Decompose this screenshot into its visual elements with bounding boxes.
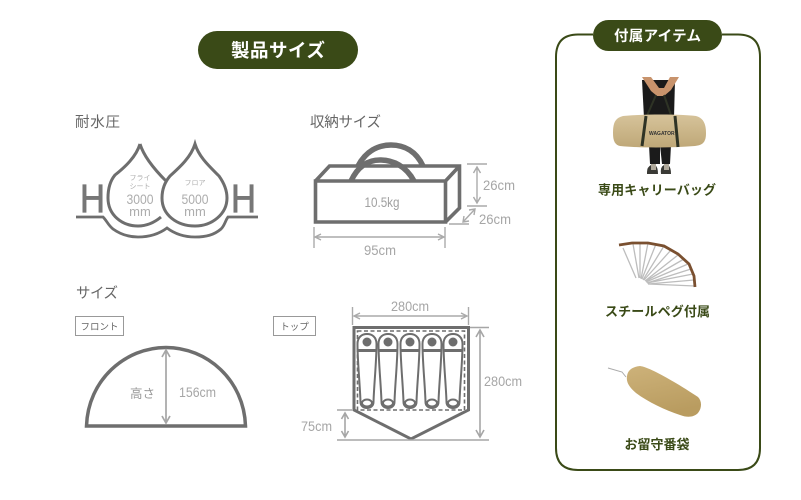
photo: steel pegs — [619, 243, 695, 287]
icon: box — [316, 166, 460, 222]
panel heading pill: 付属アイテム — [614, 28, 701, 45]
fly sheet label: フライ — [130, 174, 150, 182]
water resistance diagram — [76, 144, 258, 237]
dimension: vestibule — [337, 410, 352, 437]
top view diagram — [301, 298, 522, 440]
dimension: width — [314, 227, 445, 248]
fly sheet label: シート — [130, 184, 150, 190]
icon: ground line with dips — [76, 217, 258, 237]
front label — [76, 316, 124, 336]
fly sheet label: 3000 — [126, 191, 154, 207]
height arrow — [162, 350, 170, 423]
icon: fly sheet drop — [108, 144, 166, 226]
photo: carry bag held by person — [613, 77, 706, 174]
floor label: mm — [184, 204, 206, 219]
front label: フロント — [80, 322, 119, 333]
title: product size: 製品サイズ — [231, 40, 325, 61]
heading: storage size: 収納サイズ — [310, 114, 381, 131]
heading: size: サイズ — [76, 285, 118, 302]
dimension: depth — [337, 328, 489, 440]
floor label: 5000 — [182, 191, 209, 207]
top label: トップ — [280, 322, 309, 333]
dimension: height — [467, 164, 487, 206]
top view diagram: 280cm — [391, 298, 429, 314]
top view diagram: 280cm — [484, 373, 522, 389]
icon: handles — [358, 145, 423, 166]
icon: sleeping bags — [358, 334, 462, 408]
icon: tent floor — [354, 328, 468, 439]
panel heading pill — [593, 20, 722, 51]
icon: floor drop — [162, 144, 227, 226]
weight: 10.5kg — [364, 194, 400, 210]
icon: tent dome — [86, 348, 246, 426]
storage bag diagram: 26cm — [483, 177, 515, 193]
floor label — [182, 179, 209, 219]
right H: H — [231, 177, 256, 221]
title: product size — [198, 31, 358, 69]
height value: 156cm — [179, 384, 216, 400]
label: steel pegs: スチールペグ付属 — [605, 304, 710, 319]
photo: stuff sack — [608, 366, 701, 417]
panel: included items — [556, 20, 760, 470]
dimension: depth — [449, 209, 475, 224]
photo: carry bag held by person: WAGATOR — [649, 131, 675, 137]
storage bag diagram: 26cm — [479, 211, 511, 227]
label: stuff sack: お留守番袋 — [624, 437, 690, 452]
top label — [274, 316, 316, 336]
height label: 高さ — [130, 386, 155, 401]
floor label: フロア — [184, 179, 206, 187]
fly sheet label — [126, 174, 154, 219]
fly sheet label: mm — [129, 204, 151, 219]
storage bag diagram — [314, 145, 515, 258]
top view diagram: 75cm — [301, 418, 332, 434]
front view diagram — [86, 348, 246, 426]
dimension: top width — [352, 307, 468, 325]
label: carry bag: 専用キャリーバッグ — [598, 182, 716, 198]
left H: H — [80, 177, 105, 221]
storage bag diagram: 95cm — [364, 242, 396, 258]
heading: water resistance: 耐水圧 — [75, 114, 120, 131]
inner tent dashed — [358, 331, 464, 410]
